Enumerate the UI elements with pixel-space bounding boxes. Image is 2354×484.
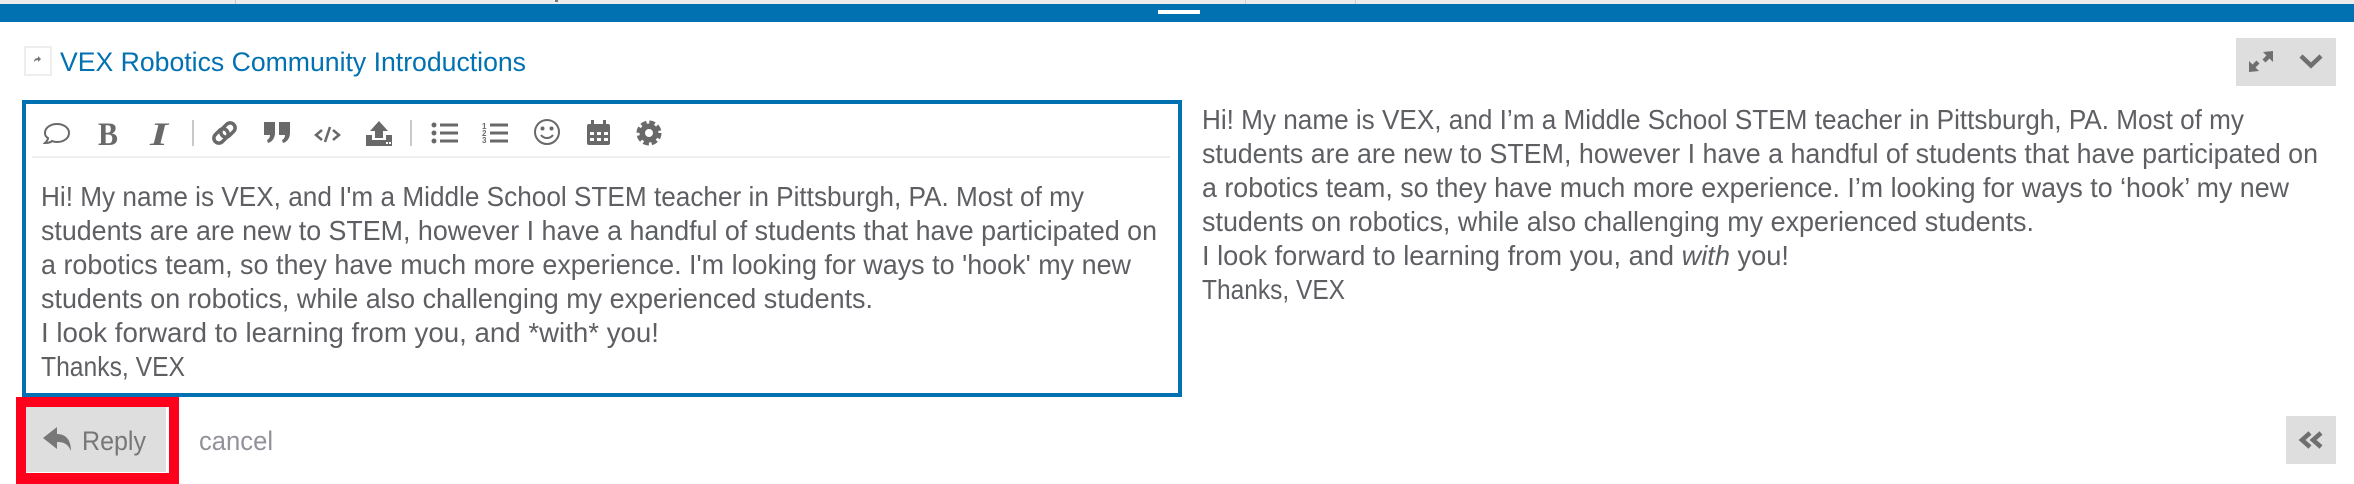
editor text: a robotics team, so they have much more experience. I'm looking for ways to 'hook' my new <box>41 249 1132 280</box>
reply label: Reply <box>82 426 146 456</box>
icon: numbered list: 3 <box>482 136 487 145</box>
icon: link <box>212 121 237 145</box>
icon: collapse preview button <box>2286 416 2336 464</box>
reply button <box>26 407 166 472</box>
editor text: Hi! My name is VEX, and I'm a Middle School STEM teacher in Pittsburgh, PA. Most of my <box>41 181 1084 212</box>
panel: rendered preview text: students on robotics, while also challenging my experienced students. <box>1202 206 2034 237</box>
editor text: Thanks, VEX <box>41 351 185 382</box>
icon: reply arrow <box>43 427 71 451</box>
editor text <box>41 181 1157 382</box>
icon: smiley <box>535 120 559 144</box>
icon: topic reply badge <box>25 47 51 75</box>
icon: expand and collapse controls <box>2236 38 2336 86</box>
panel: rendered preview text: Hi! My name is VEX, and I’m a Middle School STEM teacher in Pittsburgh, PA. Most of my <box>1202 104 2244 135</box>
icon: gear <box>638 122 660 144</box>
panel: rendered preview text: students are are new to STEM, however I have a handful of students that have participated on <box>1202 138 2318 169</box>
icon: numbered list: 1 <box>482 122 487 131</box>
cancel link: cancel <box>199 426 273 456</box>
editor text: students on robotics, while also challenging my experienced students. <box>41 283 873 314</box>
editor toolbar <box>32 117 1170 158</box>
editor text: students are are new to STEM, however I have a handful of students that have participated on <box>41 215 1157 246</box>
icon: upload <box>366 121 392 146</box>
panel: markdown editor <box>24 102 1180 395</box>
icon: numbered list: 2 <box>482 129 487 138</box>
editor text: I look forward to learning from you, and *with* you! <box>41 317 659 348</box>
blue header bar with drag handle <box>0 4 2354 22</box>
icon: quote <box>264 122 290 143</box>
panel: rendered preview text <box>1202 104 2318 305</box>
icon: calendar <box>587 120 610 145</box>
icon: bulleted list <box>432 122 458 144</box>
top browser strip <box>0 0 2354 4</box>
icon: italic: I <box>149 117 170 153</box>
icon: numbered list <box>482 122 508 145</box>
panel: rendered preview text: Thanks, VEX <box>1202 274 1345 305</box>
icon: code <box>316 127 339 142</box>
panel: rendered preview text: a robotics team, so they have much more experience. I’m looking for ways to ‘hook’ my new <box>1202 172 2290 203</box>
callout: red highlight around reply button <box>16 397 179 484</box>
panel: rendered preview text: I look forward to learning from you, and with you! <box>1202 240 1789 271</box>
icon: speech bubble <box>45 124 69 143</box>
icon: bold: B <box>98 117 118 153</box>
heading: topic title: VEX Robotics Community Introductions <box>60 47 526 77</box>
